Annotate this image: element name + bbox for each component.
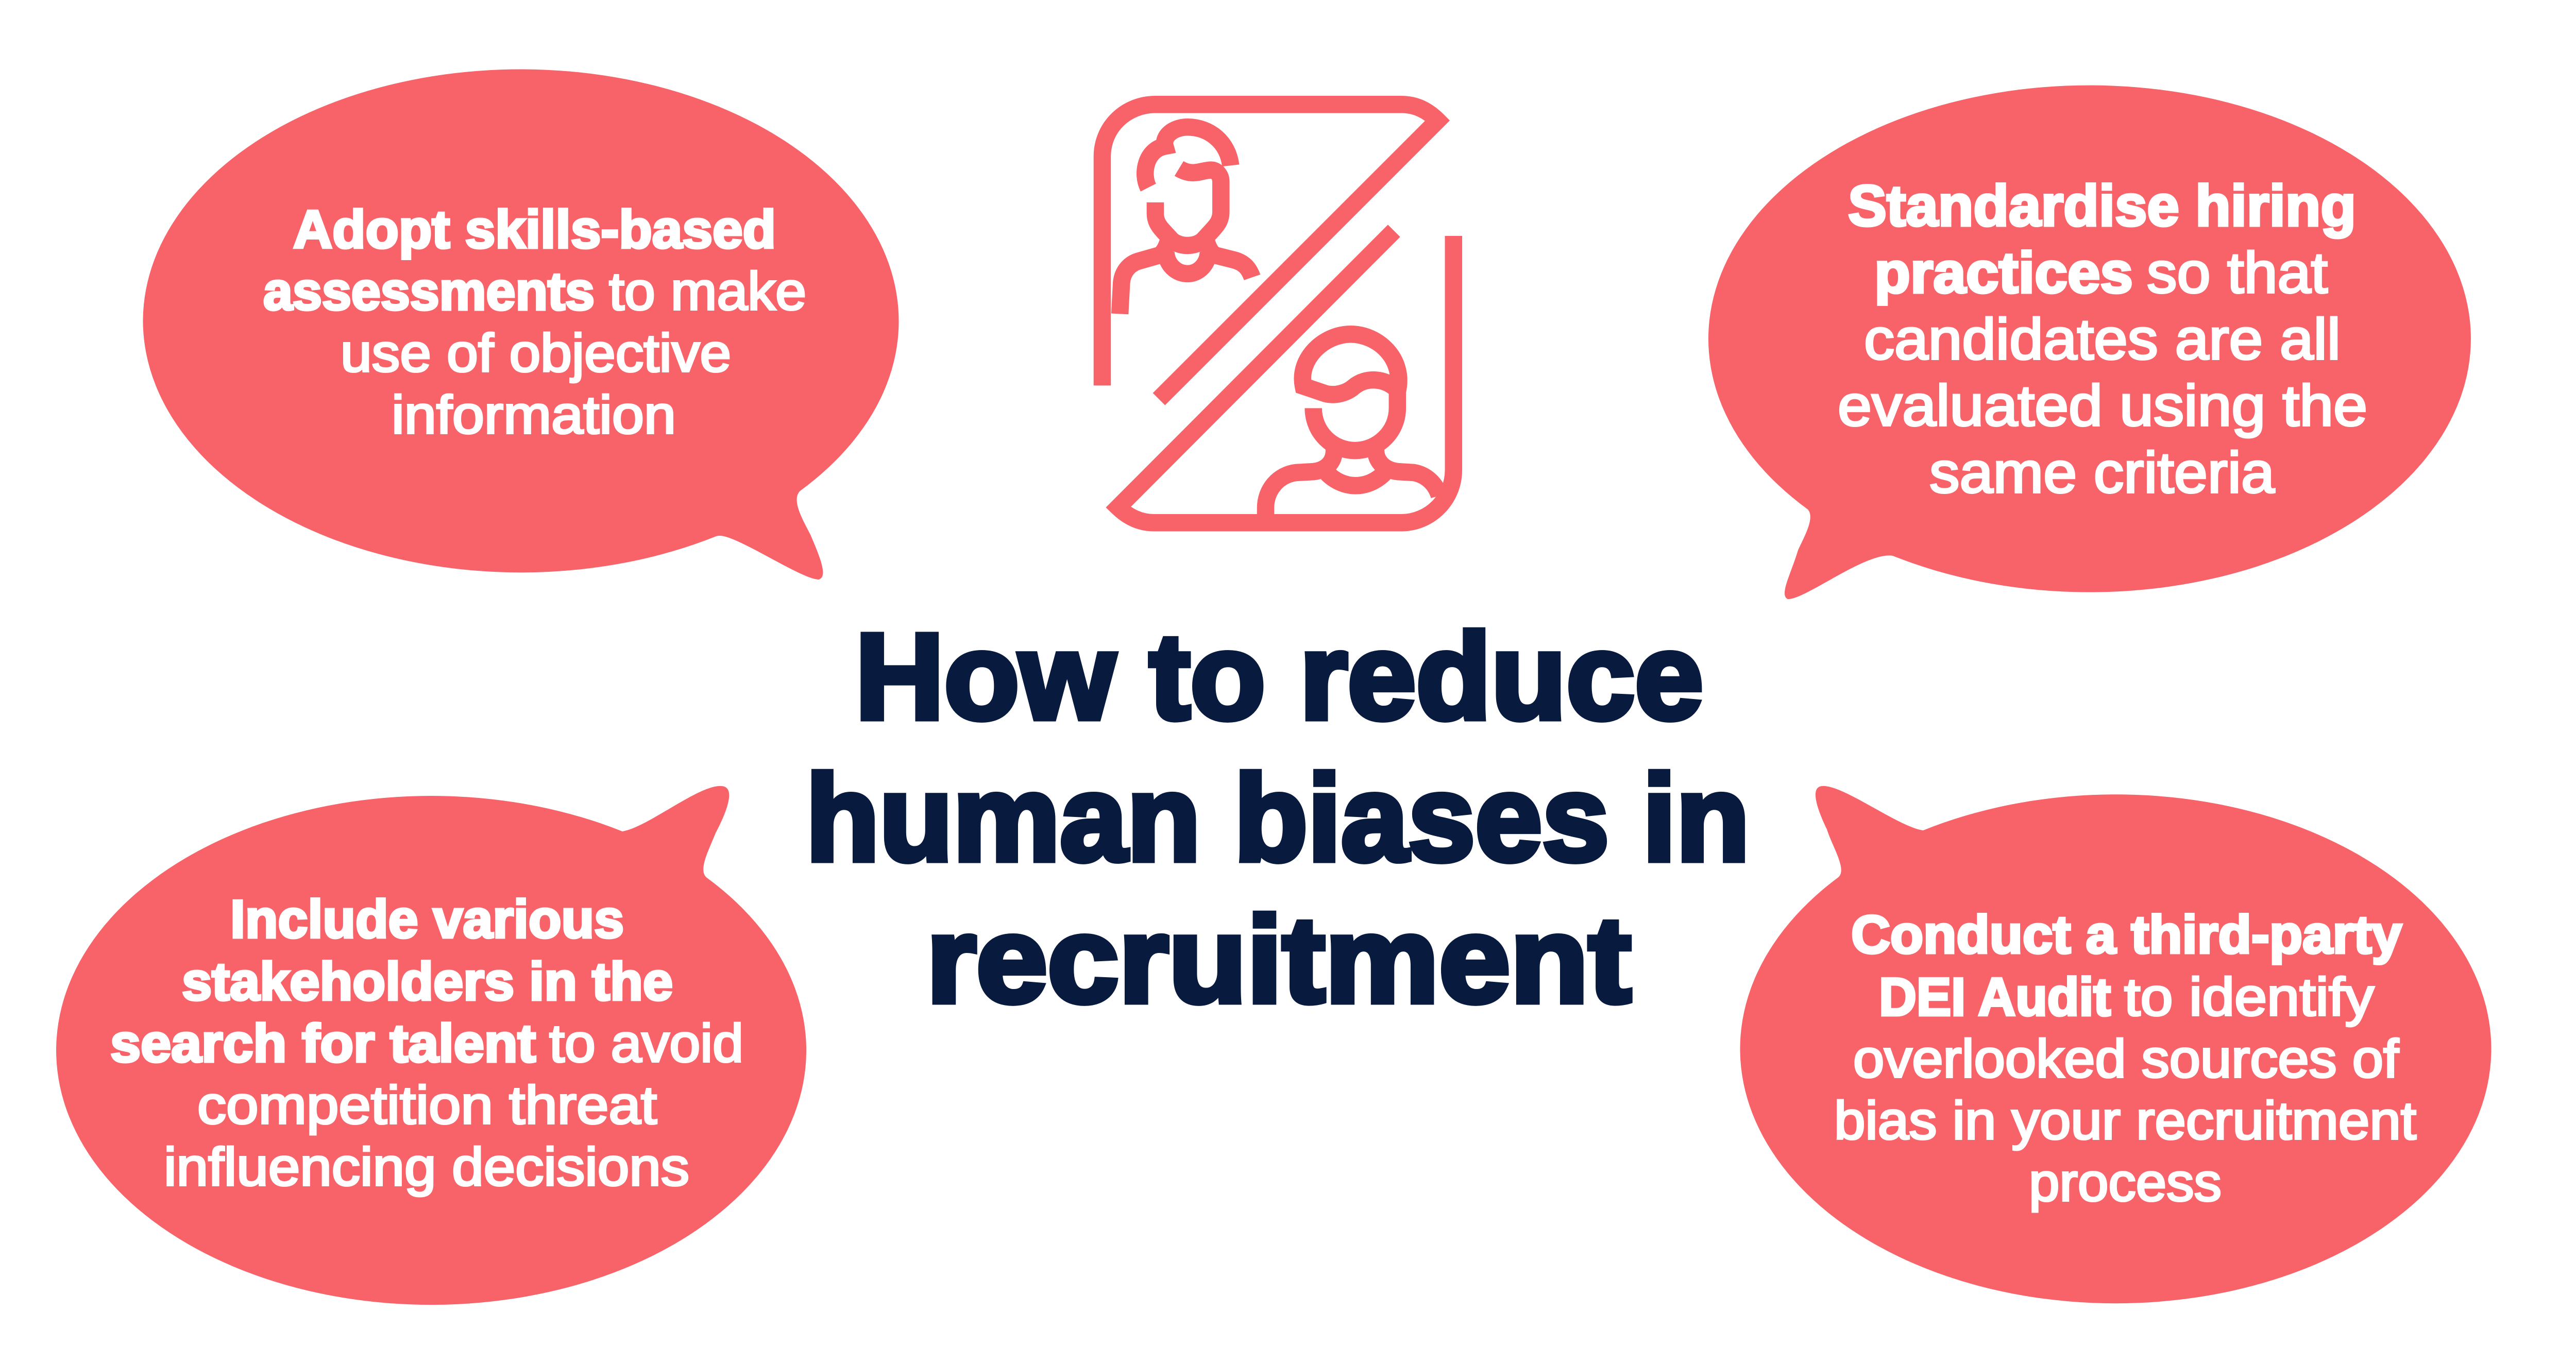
bubble text: DEI Audit — [1879, 967, 2111, 1027]
icon: upper person — [1120, 127, 1252, 314]
bubble text: to make — [609, 262, 806, 321]
panel: speech bubble bottom right, third-party DEI audit — [1740, 786, 2492, 1303]
bubble text: influencing decisions — [164, 1137, 689, 1197]
bubble text: stakeholders in the — [182, 952, 673, 1012]
bubble text: Standardise hiring — [1848, 174, 2356, 238]
panel: speech bubble bottom left, various stakeholders — [56, 786, 806, 1305]
bubble text: to identify — [2124, 967, 2374, 1027]
bubble text: use of objective — [341, 323, 731, 383]
bubble text: candidates are all — [1864, 307, 2341, 371]
bubble text — [263, 200, 806, 445]
title: recruitment — [926, 892, 1631, 1028]
icon: two people in a split frame — [1102, 105, 1453, 523]
bubble shape — [143, 70, 899, 580]
panel: speech bubble top left, skills-based assessments — [143, 70, 899, 580]
title: How to reduce — [855, 608, 1703, 745]
bubble shape — [56, 786, 806, 1305]
icon: lower person — [1265, 334, 1439, 521]
bubble text: to avoid — [549, 1014, 743, 1074]
bubble text: process — [2029, 1153, 2222, 1213]
bubble text: same criteria — [1929, 440, 2275, 505]
bubble text — [1834, 905, 2416, 1213]
bubble text: practices — [1874, 241, 2133, 305]
icon: upper frame — [1102, 105, 1437, 399]
bubble text: search for talent — [110, 1014, 536, 1074]
bubble text: assessments — [263, 262, 595, 321]
bubble text: evaluated using the — [1838, 373, 2367, 438]
bubble text: overlooked sources of — [1853, 1029, 2399, 1089]
bubble text: so that — [2147, 241, 2328, 305]
bubble text: bias in your recruitment — [1834, 1091, 2416, 1151]
bubble text — [110, 890, 743, 1197]
panel: speech bubble top right, standardise hiring practices — [1708, 86, 2471, 599]
bubble text: information — [392, 385, 676, 445]
bubble text: Adopt skills-based — [293, 200, 776, 260]
icon: lower frame — [1118, 231, 1453, 523]
bubble text — [1838, 174, 2367, 505]
bubble shape — [1740, 786, 2492, 1303]
bubble shape — [1708, 86, 2471, 599]
bubble text: competition threat — [197, 1076, 657, 1135]
bubble text: Conduct a third-party — [1851, 905, 2402, 965]
title — [806, 608, 1750, 1028]
title: human biases in — [806, 750, 1750, 887]
bubble text: Include various — [230, 890, 624, 949]
